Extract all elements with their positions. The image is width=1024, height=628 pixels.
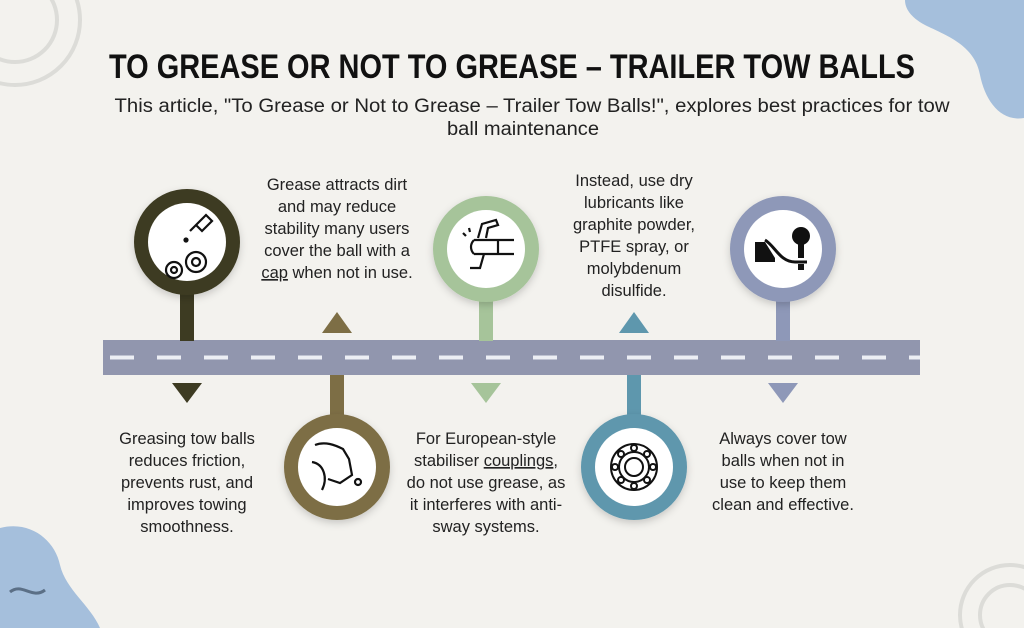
text 1: improves towing: [127, 496, 247, 514]
icon: ball bearing: [611, 444, 657, 490]
text 3: do not use grease, as: [407, 474, 565, 492]
text 2: and may reduce: [278, 198, 396, 216]
text 2: cover the ball with a: [264, 242, 411, 260]
subtitle: ball maintenance: [447, 119, 599, 140]
icon: tow ball: [755, 227, 810, 270]
text 3: stabiliser couplings,: [414, 452, 558, 470]
text 5: balls when not in: [722, 452, 844, 470]
text 1: reduces friction,: [129, 452, 245, 470]
marker 5: tow ball: [730, 196, 836, 403]
marker 4: bearing: [581, 312, 687, 520]
marker 3: coupling: [433, 196, 539, 403]
text 4: PTFE spray, or: [579, 238, 689, 256]
text 5: clean and effective.: [712, 496, 854, 514]
text 3: it interferes with anti-: [410, 496, 562, 514]
text 5: [712, 430, 854, 514]
subtitle: This article, "To Grease or Not to Grease – Trailer Tow Balls!", explores best practices for tow: [114, 96, 950, 117]
marker 2: car: [284, 312, 390, 520]
text 2: [261, 176, 413, 282]
text 3: sway systems.: [432, 518, 540, 536]
text 1: [119, 430, 255, 536]
text 3: [407, 430, 565, 536]
text 4: lubricants like: [584, 194, 684, 212]
icon: oil can and gears: [166, 215, 212, 278]
marker 1: grease gears: [134, 189, 240, 403]
text 4: graphite powder,: [573, 216, 695, 234]
text 4: [573, 172, 695, 300]
decoration: bottom-right circles: [960, 565, 1024, 628]
text 4: Instead, use dry: [575, 172, 693, 190]
decoration: top-left circles: [0, 0, 80, 85]
icon: car rear with tow ball: [312, 443, 361, 490]
icon: coupling: [463, 220, 514, 268]
text 2: stability many users: [265, 220, 409, 238]
text 4: disulfide.: [601, 282, 667, 300]
decoration: bottom-left blob: [0, 526, 100, 628]
text 1: Greasing tow balls: [119, 430, 255, 448]
text 2: Grease attracts dirt: [267, 176, 408, 194]
text 5: use to keep them: [720, 474, 846, 492]
text 1: smoothness.: [140, 518, 234, 536]
text 5: Always cover tow: [719, 430, 847, 448]
subtitle: [114, 98, 950, 135]
decoration: top-right blob: [905, 0, 1024, 118]
text 3: For European-style: [416, 430, 556, 448]
text 1: prevents rust, and: [121, 474, 253, 492]
text 4: molybdenum: [587, 260, 681, 278]
road timeline: [103, 340, 920, 375]
text 2: cap when not in use.: [261, 264, 413, 282]
